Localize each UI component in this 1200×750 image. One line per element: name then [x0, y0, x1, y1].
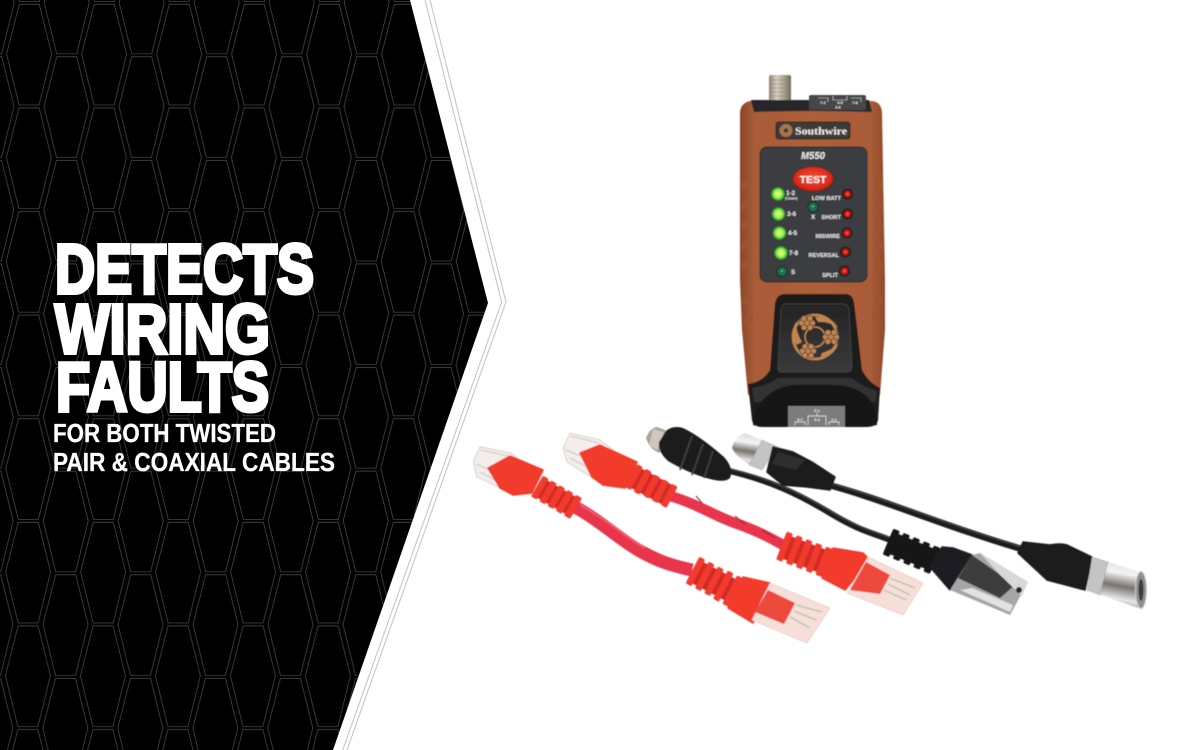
tester: logo window — [778, 304, 852, 372]
F connector adapter, black — [646, 427, 731, 481]
right boot — [728, 577, 775, 623]
tester: side grips — [742, 178, 883, 326]
TEST button: TEST — [800, 174, 827, 186]
green LEDs — [770, 186, 818, 277]
heading: WIRING — [55, 290, 270, 368]
left boot — [488, 456, 543, 495]
Southwire swirl logo — [793, 315, 839, 359]
right strain relief — [776, 531, 833, 577]
product: cable tester and patch cables — [473, 75, 1146, 643]
panel labels: LOW BATT — [812, 196, 842, 202]
tester: top cap and port label: 7-2 — [820, 100, 827, 105]
heading: DETECTS — [55, 230, 314, 308]
coax adapter: rear cable — [725, 468, 893, 541]
double chevron outline — [343, 0, 506, 750]
panel labels: X — [811, 214, 816, 221]
left boot — [580, 445, 637, 488]
tester: top cap and port label — [751, 95, 872, 112]
panel labels: 4-5 — [788, 230, 798, 237]
lower red patch cable — [473, 447, 830, 643]
right plug — [847, 557, 923, 615]
heading: FAULTS — [56, 348, 269, 426]
panel labels: 1-2 — [786, 190, 796, 197]
tester: lower band — [752, 378, 877, 402]
black RJ45 plug — [883, 529, 1028, 615]
coax adapter: front cable — [825, 482, 1025, 550]
left plug — [473, 447, 527, 488]
panel labels — [785, 190, 842, 279]
black chevron panel — [0, 0, 488, 750]
tester: bottom port label: 8-7 — [797, 417, 804, 422]
tester: bottom port label: 9-1 — [814, 408, 821, 413]
left plug — [563, 433, 617, 478]
F connector adapter, knurled — [732, 433, 835, 490]
tester: top cap and port label: 7-8 — [852, 100, 859, 105]
tester: base arch — [753, 385, 877, 427]
wire — [670, 496, 785, 546]
tester: Southwire badge: Southwire — [795, 126, 847, 138]
red LEDs — [839, 188, 853, 276]
upper red patch cable — [563, 433, 923, 615]
coax adapter: far end connector — [1018, 542, 1146, 608]
tester: control panel — [760, 147, 867, 282]
panel labels: (Coax) — [785, 196, 798, 200]
left strain relief — [625, 464, 678, 509]
wire — [573, 506, 692, 570]
tester: F connector — [769, 75, 791, 103]
right boot — [822, 548, 870, 590]
tester: bottom port label: 2-1 — [831, 417, 838, 422]
panel labels: 3-6 — [787, 211, 797, 218]
subheading: FOR BOTH TWISTED — [53, 418, 276, 448]
subheading — [53, 418, 335, 477]
tester: bottom port label: 5-4 — [814, 417, 821, 422]
panel labels: REVERSAL — [809, 253, 840, 259]
panel labels: S — [791, 269, 795, 276]
subheading: PAIR & COAXIAL CABLES — [53, 447, 335, 477]
tester: black base and dock — [748, 294, 880, 427]
right strain relief — [685, 556, 743, 607]
right plug — [752, 583, 830, 643]
panel labels: SPLIT — [822, 273, 839, 279]
heading — [55, 230, 314, 426]
tester: Southwire badge — [776, 122, 850, 139]
tester: orange body — [740, 101, 885, 395]
model label: M550 — [801, 150, 825, 162]
tester: bottom port label — [788, 406, 845, 427]
tester: top cap and port label: 4-5 — [837, 100, 844, 105]
left strain relief — [531, 476, 582, 519]
panel labels: SHORT — [821, 215, 842, 221]
tester: top cap and port label: 3-6 — [835, 104, 842, 110]
panel labels: MISWIRE — [815, 234, 840, 240]
panel labels: 7-8 — [789, 250, 799, 257]
